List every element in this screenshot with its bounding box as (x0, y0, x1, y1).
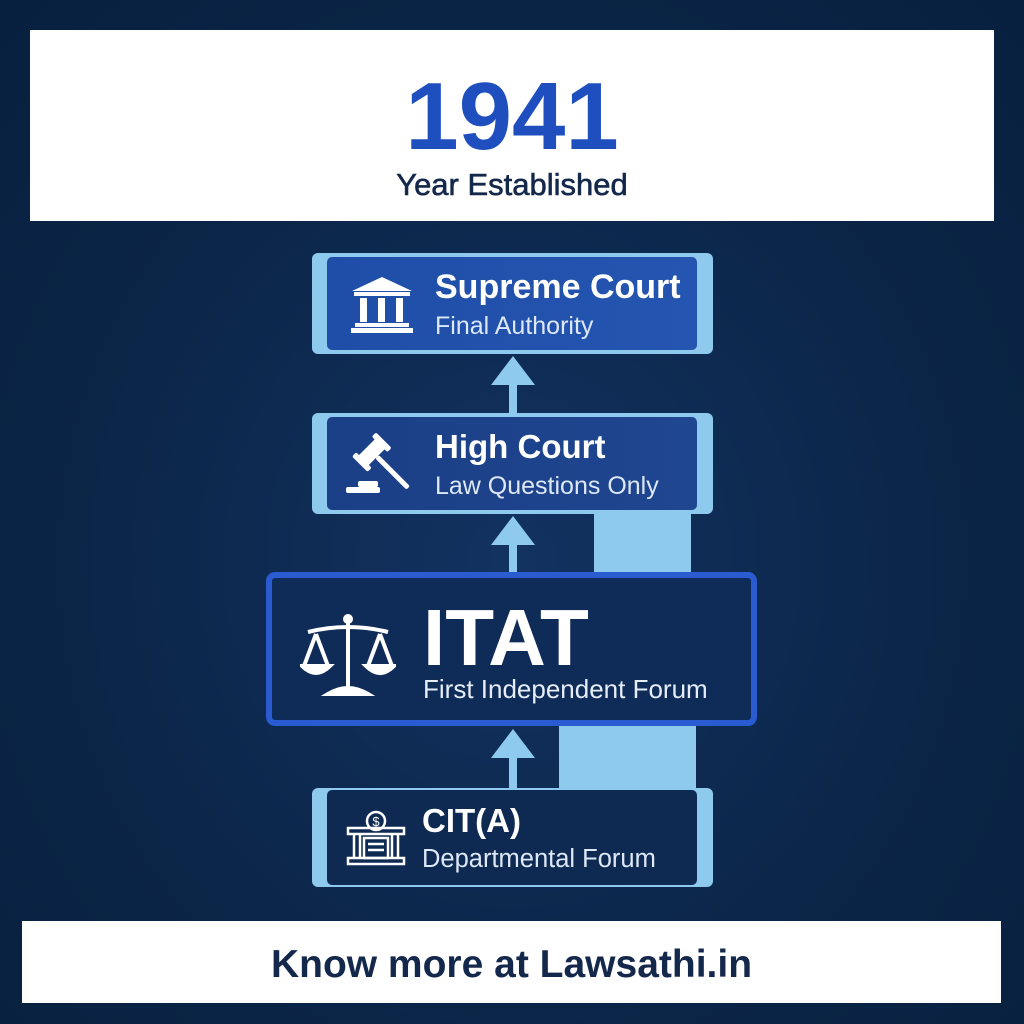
icon: tax office (346, 810, 406, 866)
subtitle: Law Questions Only (435, 472, 659, 500)
title: CIT(A) (422, 802, 521, 839)
subtitle: Departmental Forum (422, 845, 656, 873)
icon: gavel (346, 433, 410, 493)
header panel (30, 30, 994, 221)
panel: ITAT (266, 572, 757, 726)
title: Supreme Court (435, 268, 681, 306)
footer panel (22, 921, 1001, 1003)
year number: 1941 (405, 63, 619, 170)
title: High Court (435, 428, 605, 465)
icon: court building (351, 277, 413, 333)
subtitle: First Independent Forum (423, 674, 708, 704)
icon: scales (300, 614, 396, 696)
arrow: to ITAT (491, 729, 535, 788)
panel: CIT(A) (312, 788, 713, 887)
title: ITAT (423, 593, 589, 682)
arrow: to supreme court (491, 356, 535, 413)
connector bar upper (594, 514, 691, 574)
panel: high court (312, 413, 713, 514)
year label: Year Established (396, 167, 628, 202)
arrow: to high court (491, 516, 535, 572)
connector bar lower (559, 724, 696, 790)
subtitle: Final Authority (435, 312, 593, 340)
panel: supreme court (312, 253, 713, 354)
icon: tax office: $ (372, 814, 380, 829)
footer text: Know more at Lawsathi.in (271, 943, 752, 986)
